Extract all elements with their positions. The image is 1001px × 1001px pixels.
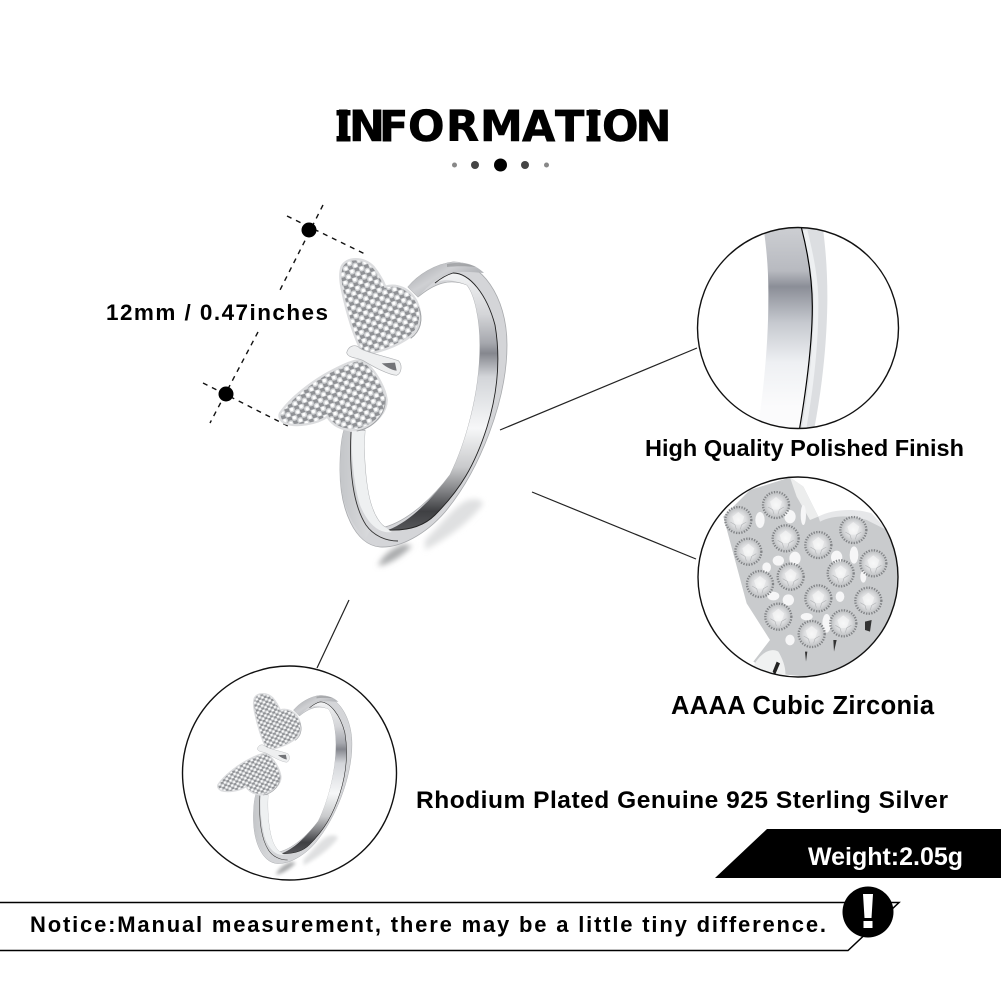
leader line: polished finish xyxy=(500,348,697,430)
detail circle: whole ring xyxy=(182,666,396,880)
label: sterling silver: Rhodium Plated Genuine 925 Sterling Silver xyxy=(416,787,948,814)
label: polished finish: High Quality Polished Finish xyxy=(645,435,964,461)
detail circle: cubic zirconia stones xyxy=(698,477,900,678)
weight banner: Weight:2.05g xyxy=(808,843,963,871)
leader line: sterling silver xyxy=(317,600,349,668)
dimension marker: butterfly width xyxy=(203,205,367,428)
leader line: cubic zirconia xyxy=(532,492,696,559)
label: cubic zirconia: AAAA Cubic Zirconia xyxy=(671,692,935,720)
notice box xyxy=(0,886,899,950)
title dot divider xyxy=(452,158,549,172)
icon: exclamation mark xyxy=(842,886,894,938)
title: INFORMATION xyxy=(335,102,672,152)
weight banner xyxy=(715,829,1001,878)
notice box: Notice:Manual measurement, there may be a little tiny difference. xyxy=(30,912,826,937)
dimension label: 12mm / 0.47inches xyxy=(106,300,328,325)
detail circle: polished band xyxy=(698,225,898,430)
main ring photo xyxy=(280,259,507,566)
